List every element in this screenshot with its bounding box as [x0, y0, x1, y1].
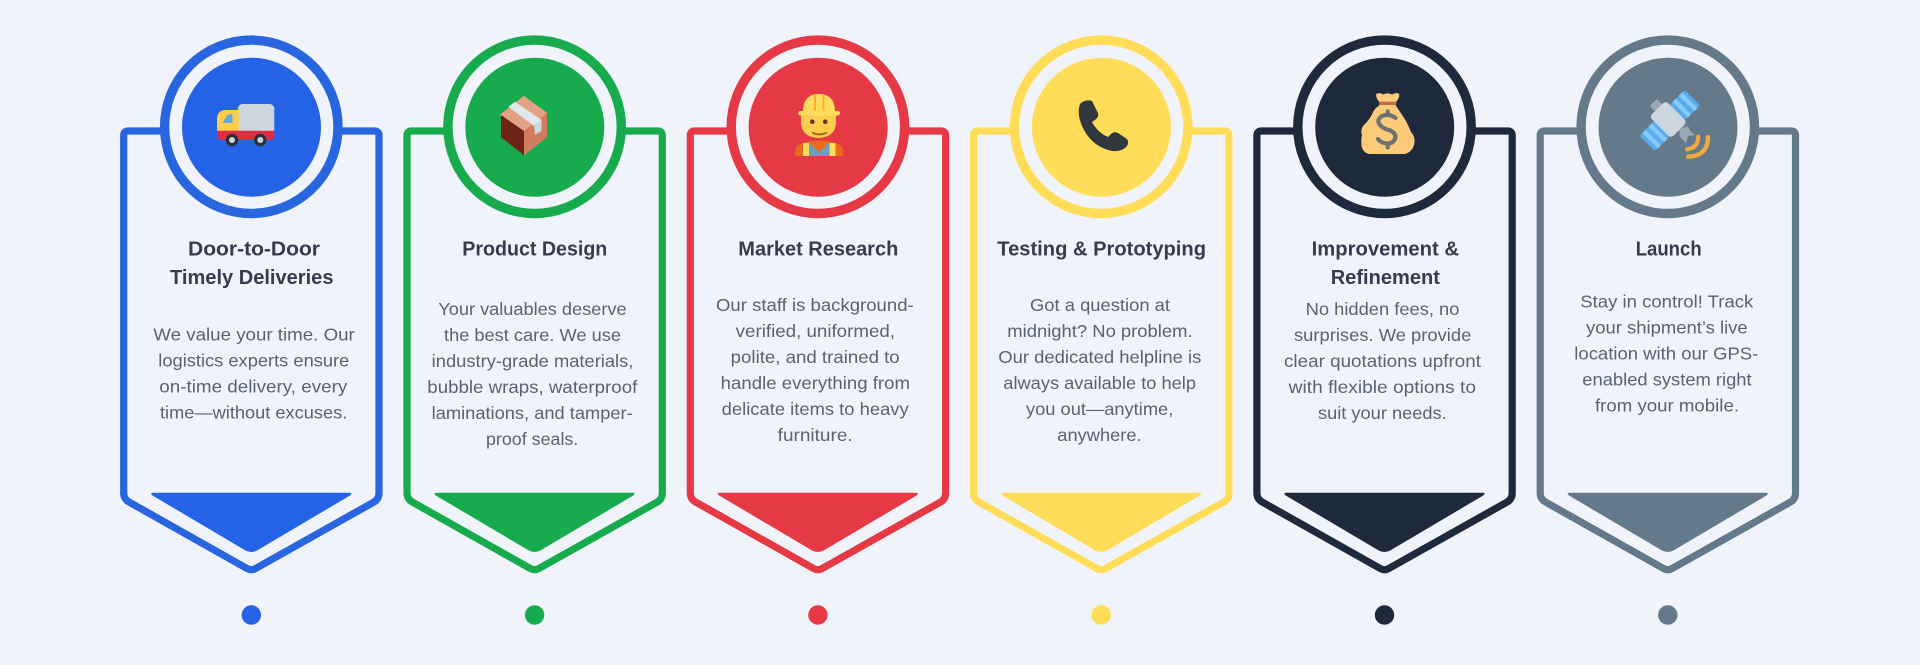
body text	[427, 299, 637, 449]
heading	[1312, 239, 1459, 289]
icon disc	[1598, 58, 1738, 197]
heading: Refinement	[1331, 267, 1440, 289]
body text: handle everything from	[721, 373, 910, 393]
dot	[525, 605, 544, 625]
bottom triangle	[718, 493, 918, 552]
icon: construction worker	[795, 94, 843, 156]
body text: Our staff is background-	[716, 295, 914, 315]
body text: surprises. We provide	[1294, 325, 1471, 345]
body text: with flexible options to	[1288, 377, 1476, 397]
panel outline	[690, 131, 946, 570]
panel: door-to-door timely deliveries	[124, 40, 379, 625]
icon: telephone	[1079, 100, 1128, 151]
panel: improvement and refinement	[1257, 40, 1512, 625]
body text	[1574, 292, 1758, 416]
body text: midnight? No problem.	[1007, 321, 1193, 341]
body text: anywhere.	[1057, 425, 1142, 445]
heading: Launch	[1636, 239, 1702, 261]
bottom triangle	[1284, 493, 1485, 552]
body text: enabled system right	[1582, 370, 1752, 390]
icon: package box	[501, 97, 547, 155]
icon: delivery truck	[217, 104, 274, 146]
dot	[1092, 605, 1111, 625]
icon disc	[1315, 58, 1454, 197]
icon disc	[465, 58, 604, 197]
bottom triangle	[1568, 493, 1768, 552]
panel outline	[124, 131, 379, 570]
body text: verified, uniformed,	[736, 321, 895, 341]
heading: Market Research	[738, 239, 898, 261]
body text: clear quotations upfront	[1284, 351, 1481, 371]
body text: laminations, and tamper-	[432, 403, 633, 423]
body text: on-time delivery, every	[159, 377, 348, 397]
heading: Product Design	[462, 239, 607, 261]
dot	[808, 605, 828, 625]
body text: the best care. We use	[444, 325, 621, 345]
body text: from your mobile.	[1595, 396, 1739, 416]
panel: market research	[690, 40, 946, 625]
body text: Our dedicated helpline is	[998, 347, 1202, 367]
body text: No hidden fees, no	[1306, 299, 1460, 319]
dot	[1658, 605, 1678, 625]
body text	[153, 325, 355, 423]
icon disc	[1032, 58, 1171, 197]
icon disc	[749, 58, 888, 197]
panel: launch	[1540, 40, 1796, 625]
panel: product design	[407, 40, 662, 625]
bottom triangle	[1001, 493, 1201, 552]
panel outline	[407, 131, 662, 570]
body text: polite, and trained to	[731, 347, 900, 367]
icon: satellite	[1639, 90, 1708, 157]
body text: always available to help	[1003, 373, 1196, 393]
heading	[170, 239, 334, 289]
body text: your shipment’s live	[1586, 318, 1748, 338]
body text: Your valuables deserve	[438, 299, 627, 319]
icon ring	[165, 40, 338, 214]
body text	[1284, 299, 1481, 423]
body text: delicate items to heavy	[722, 399, 909, 419]
body text: suit your needs.	[1318, 403, 1447, 423]
panel outline	[974, 131, 1229, 570]
panel outline	[1540, 131, 1796, 570]
icon ring	[1298, 40, 1471, 214]
body text: you out—anytime,	[1026, 399, 1173, 419]
heading: Testing & Prototyping	[997, 239, 1206, 261]
body text: Stay in control! Track	[1580, 292, 1754, 312]
body text: time—without excuses.	[160, 403, 347, 423]
icon ring	[1014, 40, 1188, 214]
icon ring	[448, 40, 621, 214]
heading: Timely Deliveries	[170, 267, 334, 289]
body text: industry-grade materials,	[432, 351, 633, 371]
panel outline	[1257, 131, 1512, 570]
dot	[242, 605, 261, 625]
bottom triangle	[434, 493, 635, 552]
body text: bubble wraps, waterproof	[427, 377, 637, 397]
body text: Got a question at	[1030, 295, 1170, 315]
bottom triangle	[151, 493, 351, 552]
body text: furniture.	[778, 425, 853, 445]
body text: logistics experts ensure	[158, 351, 349, 371]
body text	[998, 295, 1202, 445]
icon disc	[182, 58, 321, 197]
body text: proof seals.	[486, 429, 578, 449]
panel: testing and prototyping	[974, 40, 1229, 625]
body text: We value your time. Our	[153, 325, 355, 345]
icon ring	[1581, 40, 1755, 214]
icon ring	[731, 40, 905, 214]
icon: money bag	[1361, 93, 1415, 154]
body text	[716, 295, 914, 445]
dot	[1375, 605, 1394, 625]
heading: Door-to-Door	[188, 239, 320, 261]
heading: Improvement &	[1312, 239, 1459, 261]
body text: location with our GPS-	[1574, 344, 1758, 364]
